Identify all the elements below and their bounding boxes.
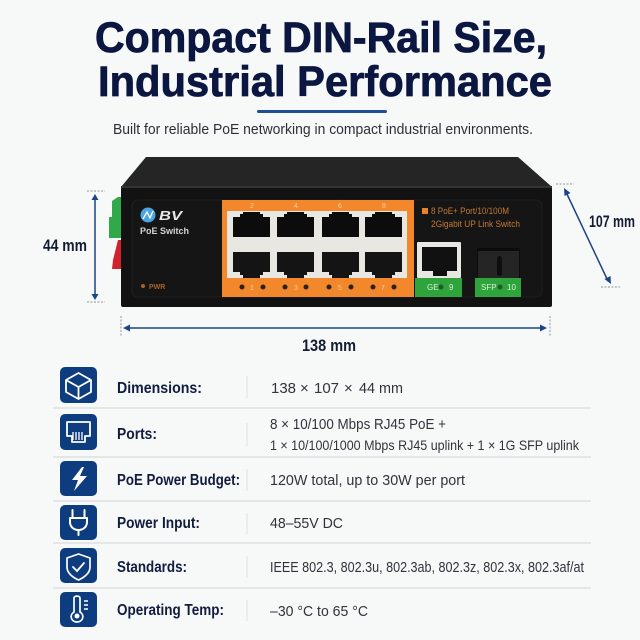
subtitle: Built for reliable PoE networking in compact industrial environments. (113, 121, 533, 138)
label: Ports: (117, 426, 157, 443)
depth dimension: 107 mm (556, 184, 635, 287)
upper port numbers: 2 (250, 203, 254, 210)
SFP port 10 (475, 248, 521, 297)
value: × (344, 380, 353, 397)
switch device (109, 157, 552, 307)
value: 44 mm (359, 380, 403, 397)
value: IEEE 802.3, 802.3u, 802.3ab, 802.3z, 802.3x, 802.3af/at (270, 560, 584, 576)
lower port numbers and LEDs: 1 (250, 285, 254, 292)
height dimension: 44 mm (43, 191, 105, 302)
icon: shield check (60, 548, 97, 583)
value: 107 (314, 380, 339, 397)
upper RJ45 ports (233, 212, 402, 237)
lower port numbers and LEDs: 7 (381, 285, 385, 292)
upper port numbers: 4 (294, 203, 298, 210)
logo (140, 208, 184, 223)
icon: thermometer (60, 592, 97, 627)
value: –30 °C to 65 °C (270, 603, 368, 620)
model label: PoE Switch (140, 226, 189, 237)
GE port 9 (415, 242, 462, 297)
width dimension: 138 mm: 138 mm (302, 336, 356, 355)
title: Industrial Performance (98, 58, 552, 106)
height dimension: 44 mm: 44 mm (43, 236, 87, 255)
width dimension: 138 mm (121, 316, 550, 355)
row: PoE power budget (60, 461, 466, 496)
GE port 9: GE (427, 283, 439, 292)
orange port panel (222, 200, 414, 297)
icon: ethernet port (60, 414, 97, 450)
uplink label (422, 206, 520, 230)
value: 8 × 10/100 Mbps RJ45 PoE + (270, 417, 446, 433)
label: Dimensions: (117, 380, 202, 397)
upper port numbers (250, 203, 386, 210)
lower port numbers and LEDs: 5 (338, 285, 342, 292)
logo: BV (159, 208, 184, 223)
label: PoE Power Budget: (117, 472, 240, 489)
value: 138 (271, 380, 296, 397)
GE port 9: 9 (449, 283, 454, 292)
lower port numbers and LEDs: 3 (294, 285, 298, 292)
icon: plug (60, 505, 97, 540)
uplink label: 8 PoE+ Port/10/100M (431, 206, 509, 217)
SFP port 10: 10 (507, 283, 516, 292)
value: 1 × 10/100/1000 Mbps RJ45 uplink + 1 × 1G SFP uplink (270, 437, 580, 453)
SFP port 10: SFP (481, 283, 497, 292)
row: standards (60, 548, 584, 583)
row: dimensions (60, 367, 403, 403)
title (95, 14, 552, 106)
row: ports (60, 414, 580, 453)
value (270, 417, 580, 453)
row: operating temperature (60, 592, 368, 627)
upper port numbers: 8 (382, 203, 386, 210)
label: Power Input: (117, 515, 200, 532)
red terminal (112, 240, 121, 269)
device top face (121, 157, 552, 187)
green terminal block (109, 197, 121, 238)
row: power input (60, 505, 343, 540)
icon: lightning bolt (60, 461, 97, 496)
power indicator (141, 284, 165, 291)
power indicator: PWR (149, 284, 165, 291)
value: 120W total, up to 30W per port (270, 472, 466, 489)
value: × (300, 380, 309, 397)
value: 48–55V DC (270, 515, 343, 532)
label: Standards: (117, 559, 187, 576)
title: Compact DIN-Rail Size, (95, 14, 547, 62)
upper port numbers: 6 (338, 203, 342, 210)
lower port numbers and LEDs (240, 284, 396, 292)
title underline (257, 110, 387, 113)
label: Operating Temp: (117, 602, 224, 619)
device front face (121, 187, 552, 307)
lower RJ45 ports (233, 252, 402, 278)
icon: cube (60, 367, 97, 403)
uplink label: 2Gigabit UP Link Switch (431, 219, 520, 230)
